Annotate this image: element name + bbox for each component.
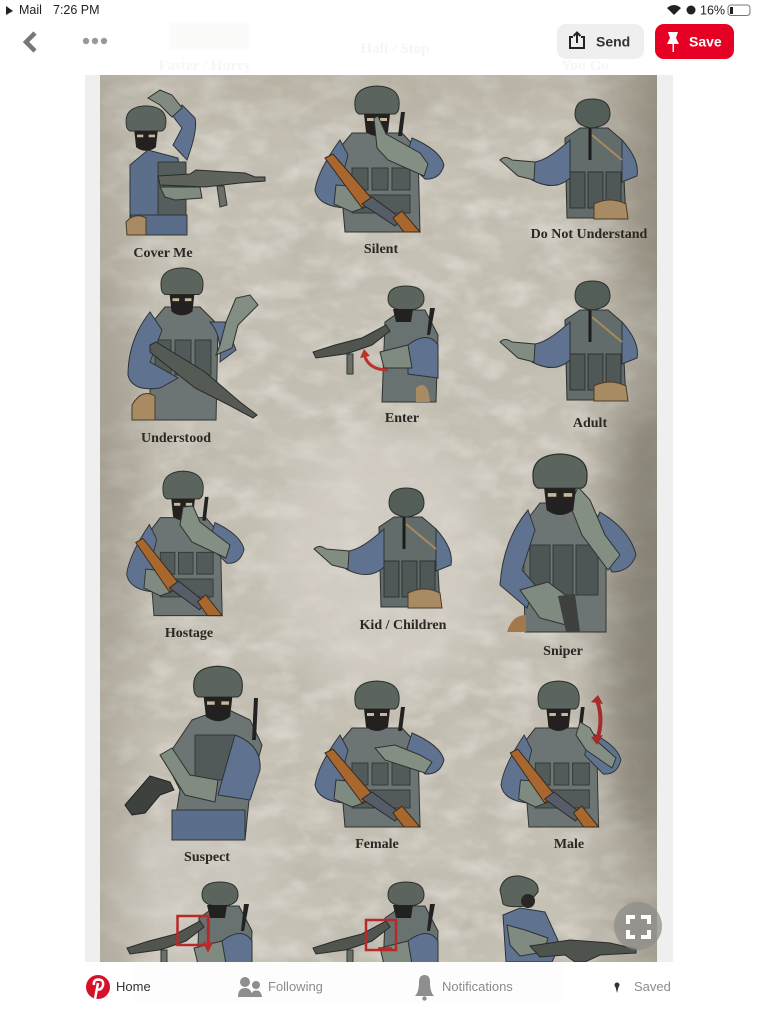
save button: Save xyxy=(689,34,722,50)
figure: Adult xyxy=(500,281,637,401)
status bar: 7:26 PM xyxy=(53,3,100,17)
home tab xyxy=(86,975,151,999)
label: Silent: Silent xyxy=(364,242,398,257)
label: Cover Me: Cover Me xyxy=(133,246,193,261)
status bar: Mail xyxy=(19,3,42,17)
label: Suspect: Suspect xyxy=(184,850,230,865)
fullscreen button xyxy=(614,902,662,950)
figure: Hostage xyxy=(127,471,244,616)
figure: Enter xyxy=(313,286,438,402)
label: Female: Female xyxy=(355,837,399,852)
label: Male: Male xyxy=(554,837,584,852)
label: Enter: Enter xyxy=(385,411,419,426)
figure: Do Not Understand xyxy=(500,99,637,219)
following tab: Following xyxy=(268,979,323,994)
following tab xyxy=(238,977,323,997)
notifications tab xyxy=(415,975,513,1001)
faded image behind top bar: Faster / Hurry xyxy=(158,58,252,74)
figure: Understood xyxy=(128,268,258,420)
label: Kid / Children: Kid / Children xyxy=(360,618,447,633)
home tab: Home xyxy=(116,979,151,994)
label: Adult: Adult xyxy=(573,416,607,431)
bottom navigation bar xyxy=(0,962,758,1011)
figure: bottom left signal xyxy=(126,882,252,962)
label: Do Not Understand: Do Not Understand xyxy=(531,227,648,242)
figure: Female xyxy=(315,681,444,827)
figure: Male xyxy=(501,681,621,827)
more dots xyxy=(83,38,107,44)
status bar xyxy=(6,3,750,18)
label: Hostage: Hostage xyxy=(165,626,213,641)
saved tab: Saved xyxy=(634,979,671,994)
status bar: 16% xyxy=(700,4,725,18)
send button: Send xyxy=(596,34,630,50)
figure: bottom right signal xyxy=(500,876,636,962)
notifications tab: Notifications xyxy=(442,979,513,994)
faded image behind top bar: You Go xyxy=(561,58,609,74)
figure: Suspect xyxy=(125,666,262,840)
saved tab xyxy=(614,979,671,994)
poster panel xyxy=(85,60,685,998)
figure: bottom middle signal xyxy=(312,882,438,962)
figure: Cover Me xyxy=(126,90,265,235)
faded image behind top bar xyxy=(158,22,609,74)
figure: Silent xyxy=(315,86,444,232)
label: Sniper: Sniper xyxy=(543,644,583,659)
figure: Sniper xyxy=(500,454,636,632)
label: Understood: Understood xyxy=(141,431,211,446)
save button xyxy=(655,24,734,59)
send button xyxy=(557,24,644,59)
figure: Kid / Children xyxy=(314,488,451,608)
faded image behind top bar: Halt / Stop xyxy=(360,41,430,57)
back chevron xyxy=(26,33,35,51)
